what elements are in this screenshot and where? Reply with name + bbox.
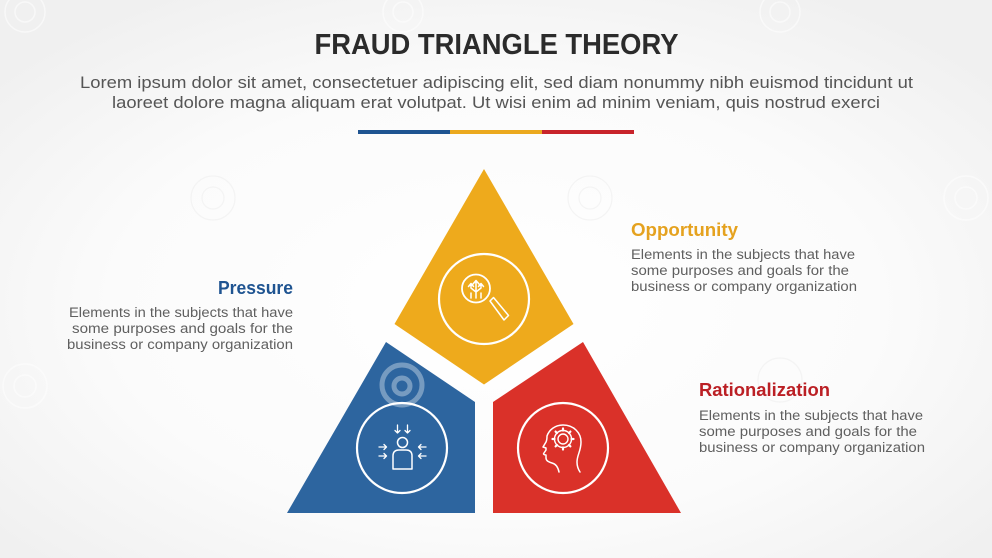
panel: rationalization segment — [493, 342, 681, 513]
heading: pressure: Pressure — [218, 278, 293, 298]
icon: person under pressure — [357, 403, 447, 493]
intro paragraph — [80, 73, 913, 112]
panel: pressure segment — [287, 342, 475, 513]
description: rationalization: business or company organization — [699, 440, 925, 455]
title: FRAUD TRIANGLE THEORY — [314, 29, 678, 61]
text block: opportunity — [631, 219, 857, 294]
tri-colour divider — [358, 130, 634, 134]
description: pressure: business or company organization — [67, 337, 293, 352]
text block: rationalization — [699, 379, 925, 455]
description: rationalization — [699, 408, 925, 455]
text block: pressure — [67, 278, 293, 352]
description: pressure — [67, 305, 293, 352]
intro paragraph: Lorem ipsum dolor sit amet, consectetuer adipiscing elit, sed diam nonummy nibh euismod tincidunt ut — [80, 73, 913, 92]
panel: opportunity segment — [394, 169, 574, 384]
description: opportunity: business or company organization — [631, 279, 857, 294]
intro paragraph: laoreet dolore magna aliquam erat volutpat. Ut wisi enim ad minim veniam, quis nostrud exerci — [112, 93, 880, 112]
description: rationalization: Elements in the subjects that have — [699, 408, 923, 423]
icon: head with gear — [518, 403, 608, 493]
heading: opportunity: Opportunity — [631, 219, 739, 240]
description: opportunity — [631, 247, 857, 294]
watermark on pressure segment — [382, 365, 422, 405]
description: pressure: some purposes and goals for the — [72, 321, 293, 336]
description: opportunity: Elements in the subjects that have — [631, 247, 855, 262]
description: rationalization: some purposes and goals for the — [699, 424, 917, 439]
description: pressure: Elements in the subjects that have — [69, 305, 293, 320]
heading: rationalization: Rationalization — [699, 379, 830, 400]
icon: magnifier with arrows — [439, 254, 529, 344]
description: opportunity: some purposes and goals for the — [631, 263, 849, 278]
